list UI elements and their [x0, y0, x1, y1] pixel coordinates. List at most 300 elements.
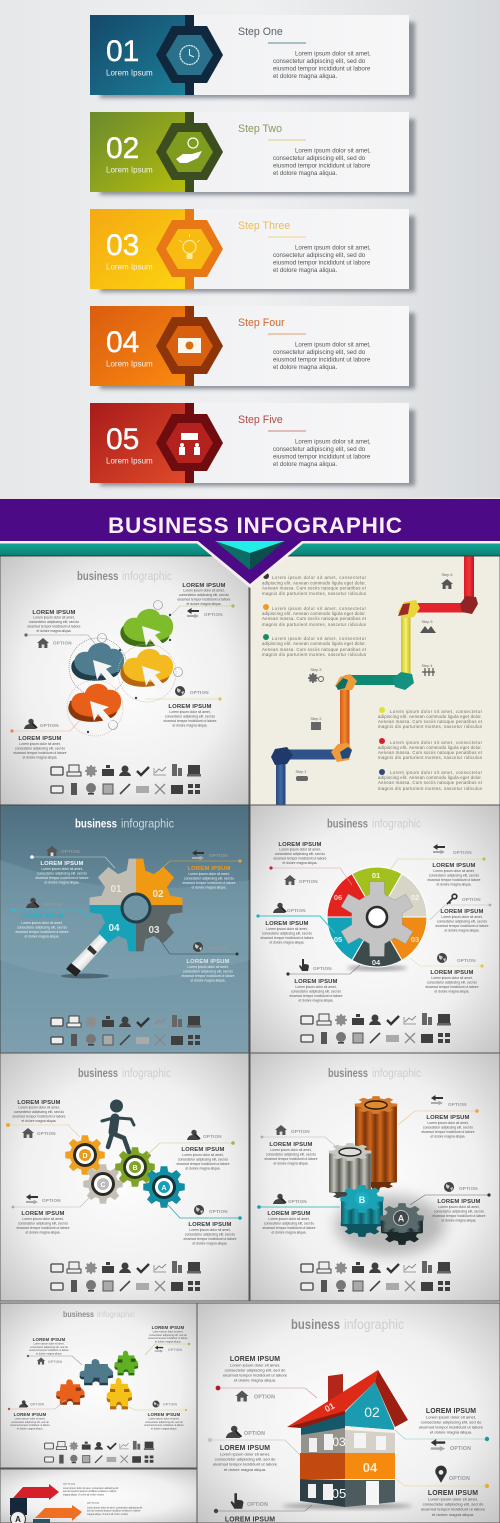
callout: upper left: OPTION	[37, 1131, 56, 1136]
callout: lower right	[397, 1466, 489, 1517]
callout: lower left	[214, 1493, 312, 1523]
chart: running figure on gears: A	[161, 1185, 167, 1192]
callout: lower right	[410, 1182, 491, 1222]
chart: running figure on gears: B	[132, 1165, 138, 1172]
title: BUSINESS INFOGRAPHIC	[108, 513, 402, 538]
chart: house: 05	[332, 1486, 346, 1501]
callout: lower left	[10, 715, 85, 760]
callout: upper right: LOREM IPSUM	[182, 583, 226, 589]
panel: ribbon staircase	[250, 556, 500, 805]
callout: lower right: LOREM IPSUM	[428, 1490, 478, 1497]
icon: flowchart	[166, 423, 213, 463]
chart: gear quadrants: 04	[108, 923, 120, 934]
callout: upper left: Lorem ipsum dolor sit amet,	[18, 1106, 60, 1110]
callout: lower right: LOREM IPSUM	[148, 1412, 181, 1417]
callout: upper left: et dolore magna aliqua.	[36, 1352, 62, 1355]
callout: lower right: Lorem ipsum dolor sit amet,	[189, 1228, 231, 1232]
panel: running man gears: business	[78, 1068, 118, 1080]
icon row	[51, 1261, 201, 1292]
callout: upper left: Lorem ipsum dolor sit amet,	[33, 616, 75, 620]
callout: upper left	[269, 842, 352, 885]
chart: gear quadrants: 01	[110, 884, 122, 895]
panel: magnifier gear: infographic	[121, 818, 174, 830]
callout: lower right: consectetur adipiscing elit, sed do	[165, 714, 215, 718]
panel: step four	[90, 306, 415, 389]
text blocks left: Lorem ipsum dolor sit amet, consectetur	[272, 575, 367, 580]
callout: lower right: OPTION	[190, 690, 209, 695]
panel: step one: eiusmod tempor incididunt ut labore	[273, 66, 371, 72]
callout: upper left: OPTION	[53, 640, 72, 646]
callout: lower left: et dolore magna aliqua.	[299, 998, 334, 1002]
callout: middle right	[430, 894, 491, 932]
panel: top-left clouds: business	[77, 571, 118, 583]
text block: first: OPTION	[63, 1482, 75, 1486]
callout: left: Lorem ipsum dolor sit amet,	[21, 921, 63, 925]
callout: upper right: et dolore magna aliqua.	[437, 882, 472, 886]
callout: upper left: OPTION	[61, 849, 80, 854]
callout: lower left: OPTION	[30, 1402, 45, 1406]
panel: step four: 04	[106, 326, 139, 359]
callout: upper right: eiusmod tempor incididunt ut labore	[428, 878, 481, 882]
callout: lower left: consectetur adipiscing elit, sed do	[15, 746, 65, 750]
panel: step five: eiusmod tempor incididunt ut labore	[273, 454, 371, 460]
panel: puzzle pieces: business	[63, 1309, 94, 1319]
callout: lower left: consectetur adipiscing elit, sed do	[291, 990, 341, 994]
callout: lower right: et dolore magna aliqua.	[435, 990, 470, 994]
panel: 3d gear columns	[250, 1053, 500, 1301]
callout: lower right: LOREM IPSUM	[168, 704, 212, 710]
panel: running man gears: infographic	[122, 1068, 171, 1080]
callout: lower left: LOREM IPSUM	[294, 979, 338, 985]
panel: step two	[90, 112, 415, 195]
callout: upper left: Lorem ipsum dolor sit amet,	[41, 867, 83, 871]
callout: lower right	[145, 686, 222, 728]
callout: lower right: Lorem ipsum dolor sit amet,	[428, 1496, 478, 1502]
callout: lower right: et dolore magna aliqua.	[432, 1512, 474, 1517]
panel: puzzle pieces	[0, 1303, 197, 1468]
panel: step three: et dolore magna aliqua.	[273, 267, 337, 274]
chart: house	[282, 1370, 412, 1509]
panel: step one: Step One	[238, 26, 283, 38]
callout: lower left: OPTION	[288, 1199, 307, 1204]
callout: upper left: Lorem ipsum dolor sit amet,	[34, 1342, 65, 1346]
callout: upper right: LOREM IPSUM	[426, 1115, 470, 1121]
chart: segmented ring: 05	[334, 935, 342, 944]
callout: upper left: et dolore magna aliqua.	[45, 880, 80, 884]
callout: upper right	[160, 850, 242, 890]
callout: upper right: consectetur adipiscing elit, sed do	[423, 1126, 473, 1130]
callout: upper left: eiusmod tempor incididunt ut labore	[223, 1372, 288, 1378]
callout: upper right: OPTION	[203, 1134, 222, 1139]
callout: upper left: consectetur adipiscing elit, sed do	[29, 620, 79, 624]
panel: step two: Step Two	[238, 123, 282, 135]
panel: step four: consectetur adipiscing elit, sed do	[273, 349, 366, 356]
callout: upper right: consectetur adipiscing elit, sed do	[184, 876, 234, 880]
callout: upper left: eiusmod tempor incididunt ut labore	[28, 624, 81, 628]
chart: gear columns	[329, 1096, 445, 1255]
callout: middle left: et dolore magna aliqua.	[270, 940, 305, 944]
callout: lower right: eiusmod tempor incididunt ut labore	[426, 985, 479, 989]
callout: upper left: OPTION	[48, 1360, 63, 1364]
callout: upper right: OPTION	[448, 1102, 467, 1107]
callout: lower left: consectetur adipiscing elit, sed do	[18, 1222, 68, 1226]
callout: upper left: consectetur adipiscing elit, sed do	[14, 1110, 64, 1114]
chart: segmented ring: 02	[411, 893, 419, 902]
callout: upper left: eiusmod tempor incididunt ut labore	[36, 876, 89, 880]
panel: step three: Lorem Ipsum	[106, 262, 153, 272]
callout: upper left: eiusmod tempor incididunt ut labore	[274, 856, 327, 860]
icon row	[45, 1441, 154, 1464]
panel: step two: 02	[106, 132, 139, 165]
panel: step four: Lorem Ipsum	[106, 360, 153, 368]
text blocks right: magnis dis parturient montes, nascetur ridiculus	[378, 755, 482, 760]
callout: upper right: eiusmod tempor incididunt ut labore	[422, 1130, 475, 1134]
panel: house	[197, 1303, 500, 1523]
callout: lower right: eiusmod tempor incididunt ut labore	[433, 1214, 486, 1218]
panel: step five: Step Five	[238, 414, 283, 426]
icon row	[301, 1261, 451, 1292]
callout: lower right: et dolore magna aliqua.	[151, 1427, 177, 1430]
text block: second	[87, 1501, 143, 1516]
callout: upper right: consectetur adipiscing elit, sed do	[179, 593, 229, 597]
callout: upper right: LOREM IPSUM	[426, 1408, 476, 1415]
callout: middle right: Lorem ipsum dolor sit amet,	[441, 915, 483, 919]
callout: lower right: LOREM IPSUM	[430, 970, 474, 976]
callout: upper right: Lorem ipsum dolor sit amet,	[426, 1414, 476, 1420]
callout: lower left: LOREM IPSUM	[18, 736, 62, 742]
callout: upper right: Lorem ipsum dolor sit amet,	[188, 872, 230, 876]
icon: clock	[166, 35, 213, 75]
callout: upper left: et dolore magna aliqua.	[37, 629, 72, 633]
callout: lower left: eiusmod tempor incididunt ut labore	[263, 1226, 316, 1230]
callout: lower left: eiusmod tempor incididunt ut labore	[10, 1424, 50, 1427]
callout: upper right	[390, 844, 486, 886]
icon: hand and coin	[166, 132, 213, 172]
callout: upper right: Lorem ipsum dolor sit amet,	[182, 1153, 224, 1157]
panel: step one: Lorem ipsum dolor sit amet,	[295, 50, 371, 58]
chart: segmented ring	[327, 867, 427, 970]
callout: middle right: et dolore magna aliqua.	[445, 928, 480, 932]
callout: lower right: consectetur adipiscing elit, sed do	[423, 1502, 484, 1506]
callout: left	[12, 898, 90, 938]
text block: second: OPTION	[87, 1501, 99, 1505]
panel: step one: 01	[106, 35, 139, 68]
callout: lower right: Lorem ipsum dolor sit amet,	[169, 710, 211, 714]
callout: upper left: LOREM IPSUM	[40, 861, 84, 867]
callout: lower left: OPTION	[247, 1502, 268, 1508]
panel: step one: et dolore magna aliqua.	[273, 73, 337, 80]
callout: lower right	[410, 953, 484, 994]
chart: gear quadrants	[61, 859, 182, 978]
chart: house: 04	[363, 1460, 378, 1475]
chart: puzzle	[56, 1351, 138, 1409]
panel: house: infographic	[344, 1317, 404, 1332]
panel: puzzle pieces: infographic	[97, 1309, 135, 1319]
callout: upper right: Lorem ipsum dolor sit amet,	[153, 1330, 184, 1334]
panel: step three: consectetur adipiscing elit, sed do	[273, 252, 366, 259]
text block: first: Lorem ipsum dolor sit amet, consectetur adipiscing elit	[63, 1487, 119, 1490]
panel: step five: Lorem ipsum dolor sit amet,	[295, 438, 371, 446]
step labels: Step 1	[296, 770, 306, 774]
callout: middle left: eiusmod tempor incididunt ut labore	[213, 1462, 278, 1466]
callout: lower right: eiusmod tempor incididunt ut labore	[164, 719, 217, 723]
text blocks right: Lorem ipsum dolor sit amet, consectetur	[390, 770, 483, 775]
text blocks left	[262, 573, 367, 657]
callout: upper right: consectetur adipiscing elit, sed do	[421, 1420, 482, 1424]
chart: running figure on gears: C	[100, 1182, 106, 1189]
callout: upper right: et dolore magna aliqua.	[430, 1430, 472, 1434]
callout: lower left: et dolore magna aliqua.	[26, 1230, 61, 1234]
callout: upper left	[261, 1125, 340, 1166]
text blocks right: magnis dis parturient montes, nascetur ridiculus	[378, 786, 482, 791]
callout: lower right: OPTION	[459, 1186, 478, 1191]
panel: step four: eiusmod tempor incididunt ut labore	[273, 356, 371, 364]
text blocks right: Aenean massa. Cum sociis natoque penatibus et	[378, 780, 483, 785]
callout: upper right: Lorem ipsum dolor sit amet,	[183, 588, 225, 592]
text blocks right: adipiscing elit. Aenean commodo ligula eget dolor.	[378, 775, 482, 780]
callout: lower left: eiusmod tempor incididunt ut labore	[290, 994, 343, 998]
callout: lower right: OPTION	[163, 1402, 178, 1406]
step labels: Step 5	[422, 620, 432, 624]
callout: upper left: et dolore magna aliqua.	[22, 1119, 57, 1123]
callout: upper left: et dolore magna aliqua.	[234, 1378, 276, 1382]
callout: upper left: consectetur adipiscing elit, sed do	[37, 872, 87, 876]
callout: lower right: consectetur adipiscing elit, sed do	[185, 1232, 235, 1236]
panel: house: business	[291, 1317, 340, 1332]
callout: upper left: LOREM IPSUM	[278, 842, 322, 848]
callout: lower right: OPTION	[209, 1209, 228, 1214]
callout: lower right: Lorem ipsum dolor sit amet,	[149, 1418, 180, 1420]
panel: gear ring	[250, 805, 500, 1053]
callout: lower right: OPTION	[457, 958, 476, 963]
text blocks left: adipiscing elit. Aenean commodo ligula eget dolor.	[262, 641, 366, 646]
chart: cloud arrows	[67, 600, 182, 736]
text blocks right: magnis dis parturient montes, nascetur ridiculus	[378, 724, 482, 729]
callout: lower left	[286, 959, 360, 1002]
callout: lower right: eiusmod tempor incididunt ut labore	[182, 974, 235, 978]
callout: upper right: OPTION	[453, 850, 472, 855]
icon: money	[166, 326, 213, 366]
text block: first: sed do eiusmod tempor incididunt ut labore et dolore	[63, 1490, 117, 1493]
callout: middle left	[208, 1426, 300, 1472]
callout: upper right: LOREM IPSUM	[432, 863, 476, 869]
callout: middle right: consectetur adipiscing elit, sed do	[437, 920, 487, 924]
panel: step five: et dolore magna aliqua.	[273, 461, 337, 468]
callout: lower left: OPTION	[40, 723, 59, 728]
callout: lower right	[160, 940, 238, 982]
callout: middle left: Lorem ipsum dolor sit amet,	[220, 1452, 270, 1456]
callout: upper left: eiusmod tempor incididunt ut labore	[13, 1114, 66, 1118]
panel: step five: 05	[106, 423, 139, 456]
chart: gear quadrants: 02	[152, 889, 164, 900]
panel: 3d gear columns: business	[328, 1068, 368, 1080]
chart: house: 03	[332, 1435, 346, 1449]
panel: gear ring: business	[327, 818, 368, 830]
callout: upper left	[24, 610, 100, 650]
text blocks left: Lorem ipsum dolor sit amet, consectetur	[272, 636, 367, 641]
callout: upper right	[147, 1130, 235, 1170]
chart: running figure on gears	[65, 1100, 185, 1208]
callout: upper right: OPTION	[168, 1348, 183, 1352]
callout: lower right: Lorem ipsum dolor sit amet,	[187, 965, 229, 969]
chart: running figure on gears: D	[82, 1153, 88, 1160]
callout: upper left: LOREM IPSUM	[17, 1100, 61, 1106]
text blocks left: magnis dis parturient montes, nascetur ridiculus	[262, 591, 366, 596]
panel: step four: Lorem ipsum dolor sit amet,	[295, 342, 371, 348]
callout: lower right: eiusmod tempor incididunt ut labore	[144, 1424, 184, 1427]
callout: lower right: LOREM IPSUM	[188, 1222, 232, 1228]
text blocks right: Aenean massa. Cum sociis natoque penatibus et	[378, 719, 483, 724]
callout: middle left: Lorem ipsum dolor sit amet,	[266, 927, 308, 931]
callout: upper left: consectetur adipiscing elit, sed do	[275, 852, 325, 856]
step labels: Step 6	[442, 573, 452, 577]
icon row	[51, 764, 201, 795]
callout: lower left	[12, 1194, 92, 1234]
callout: upper left: Lorem ipsum dolor sit amet,	[270, 1148, 312, 1152]
callout: upper right: et dolore magna aliqua.	[186, 1166, 221, 1170]
callout: upper left: et dolore magna aliqua.	[274, 1162, 309, 1166]
callout: middle left: et dolore magna aliqua.	[224, 1467, 266, 1472]
callout: upper right: consectetur adipiscing elit, sed do	[429, 874, 479, 878]
callout: lower left: LOREM IPSUM	[14, 1412, 47, 1417]
panel: step two: consectetur adipiscing elit, sed do	[273, 155, 366, 162]
callout: lower right: eiusmod tempor incididunt ut labore	[184, 1237, 237, 1241]
top background	[0, 0, 500, 499]
arrow: banner pointer	[194, 541, 306, 588]
callout: middle left: consectetur adipiscing elit, sed do	[262, 932, 312, 936]
callout: upper left: LOREM IPSUM	[269, 1142, 313, 1148]
callout: lower left: Lorem ipsum dolor sit amet,	[295, 985, 337, 989]
callout: upper right: et dolore magna aliqua.	[431, 1134, 466, 1138]
panel: 3d gear columns: infographic	[372, 1068, 421, 1080]
callout: lower right: OPTION	[449, 1476, 470, 1482]
chart: house: 01	[323, 1401, 336, 1414]
callout: upper left	[27, 1337, 82, 1365]
callout: lower left: Lorem ipsum dolor sit amet,	[15, 1418, 46, 1420]
callout: upper right: OPTION	[204, 612, 223, 617]
callout: upper left: eiusmod tempor incididunt ut labore	[265, 1157, 318, 1161]
panel: step four: Step Four	[238, 317, 285, 329]
callout: upper right: LOREM IPSUM	[152, 1325, 185, 1330]
panel: step five: consectetur adipiscing elit, sed do	[273, 446, 366, 453]
chart: segmented ring: 04	[372, 958, 381, 967]
text block: first: magna aliqua. Ut enim ad minim veniam	[63, 1493, 104, 1496]
chart: ribbon arrows	[10, 1484, 82, 1523]
callout: middle right: LOREM IPSUM	[440, 909, 484, 915]
panel: step three	[90, 209, 415, 292]
text block: second: sed do eiusmod tempor incididunt ut labore et dolore	[87, 1510, 141, 1513]
panel: gear ring: infographic	[372, 818, 421, 830]
panel: step three: eiusmod tempor incididunt ut labore	[273, 260, 371, 266]
panel: step three: Step Three	[238, 220, 290, 232]
chart: segmented ring: 01	[372, 871, 380, 880]
callout: lower left: Lorem ipsum dolor sit amet,	[268, 1217, 310, 1221]
callout: lower right: et dolore magna aliqua.	[193, 1242, 228, 1246]
callout: upper right: Lorem ipsum dolor sit amet,	[427, 1121, 469, 1125]
icon row	[301, 1013, 451, 1044]
chart: gear quadrants: 03	[148, 925, 160, 936]
callout: lower left: OPTION	[313, 966, 332, 971]
text blocks left: Aenean massa. Cum sociis natoque penatibus et	[262, 647, 367, 652]
callout: upper left: consectetur adipiscing elit, sed do	[30, 1346, 68, 1349]
callout: upper left: OPTION	[291, 1129, 310, 1134]
panel: top-left clouds	[0, 556, 249, 805]
callout: lower left	[257, 1194, 340, 1234]
callout: upper right: eiusmod tempor incididunt ut labore	[419, 1424, 484, 1430]
step labels: Step 4	[422, 664, 432, 668]
callout: lower left: et dolore magna aliqua.	[272, 1230, 307, 1234]
callout: upper left: LOREM IPSUM	[230, 1356, 280, 1363]
callout: lower left: eiusmod tempor incididunt ut labore	[14, 751, 67, 755]
callout: lower right: consectetur adipiscing elit, sed do	[145, 1421, 183, 1424]
chart: segmented ring: 03	[411, 935, 419, 944]
callout: upper right: eiusmod tempor incididunt ut labore	[178, 598, 231, 602]
callout: upper right	[165, 583, 235, 621]
callout: middle left: eiusmod tempor incididunt ut labore	[261, 936, 314, 940]
callout: upper right	[395, 1408, 489, 1452]
callout: left: OPTION	[43, 902, 62, 907]
panel: step four: et dolore magna aliqua.	[273, 364, 337, 371]
callout: upper right: et dolore magna aliqua.	[187, 602, 222, 606]
callout: middle left: LOREM IPSUM	[265, 921, 309, 927]
callout: upper left: OPTION	[254, 1394, 275, 1400]
panel: magnifier gear: business	[75, 818, 117, 830]
step labels: Step 2	[311, 717, 321, 721]
panel: step two: Lorem ipsum dolor sit amet,	[295, 148, 371, 154]
panel: step one	[90, 15, 415, 98]
text blocks left: Aenean massa. Cum sociis natoque penatibus et	[262, 616, 367, 621]
panel: step two: eiusmod tempor incididunt ut labore	[273, 162, 371, 170]
callout: upper right: OPTION	[209, 853, 228, 858]
text blocks left: magnis dis parturient montes, nascetur ridiculus	[262, 652, 366, 657]
callout: upper left: LOREM IPSUM	[33, 1337, 66, 1342]
chart: segmented ring: 06	[334, 893, 342, 902]
callout: upper right: eiusmod tempor incididunt ut labore	[148, 1337, 188, 1340]
text blocks left: Lorem ipsum dolor sit amet, consectetur	[272, 606, 367, 611]
callout: lower right: Lorem ipsum dolor sit amet,	[431, 976, 473, 980]
text blocks left: adipiscing elit. Aenean commodo ligula eget dolor.	[262, 580, 366, 586]
callout: upper left: consectetur adipiscing elit, sed do	[266, 1152, 316, 1156]
text blocks left: magnis dis parturient montes, nascetur ridiculus	[262, 622, 366, 627]
callout: lower left: consectetur adipiscing elit, sed do	[11, 1421, 49, 1424]
callout: left: et dolore magna aliqua.	[25, 934, 60, 938]
callout: lower right	[125, 1400, 187, 1430]
text blocks right: adipiscing elit. Aenean commodo ligula eget dolor.	[378, 714, 482, 719]
callout: upper left	[216, 1356, 317, 1402]
callout: lower left: consectetur adipiscing elit, sed do	[264, 1222, 314, 1226]
callout: upper right: LOREM IPSUM	[181, 1147, 225, 1153]
chart: gear columns: A	[398, 1214, 405, 1224]
text blocks right: Lorem ipsum dolor sit amet, consectetur	[390, 709, 483, 714]
callout: upper right: et dolore magna aliqua.	[155, 1340, 181, 1343]
text blocks right: Lorem ipsum dolor sit amet, consectetur	[390, 740, 483, 745]
callout: lower left: et dolore magna aliqua.	[23, 756, 58, 760]
panel: step two: Lorem Ipsum	[106, 166, 153, 174]
callout: upper right: consectetur adipiscing elit, sed do	[149, 1334, 187, 1337]
callout: lower left: Lorem ipsum dolor sit amet,	[22, 1217, 64, 1221]
callout: left: eiusmod tempor incididunt ut labore	[16, 930, 69, 934]
callout: middle right: eiusmod tempor incididunt ut labore	[436, 924, 489, 928]
chart: house: 02	[364, 1404, 380, 1420]
panel: step one: consectetur adipiscing elit, sed do	[273, 58, 366, 65]
callout: middle left: OPTION	[244, 1431, 265, 1437]
panel: step five: Lorem Ipsum	[106, 456, 153, 466]
panel: top-left clouds: infographic	[122, 571, 172, 583]
callout: upper right: OPTION	[450, 1446, 471, 1452]
text block: first	[63, 1482, 119, 1496]
callout: lower right: LOREM IPSUM	[186, 959, 230, 965]
callout: middle left	[256, 903, 335, 944]
